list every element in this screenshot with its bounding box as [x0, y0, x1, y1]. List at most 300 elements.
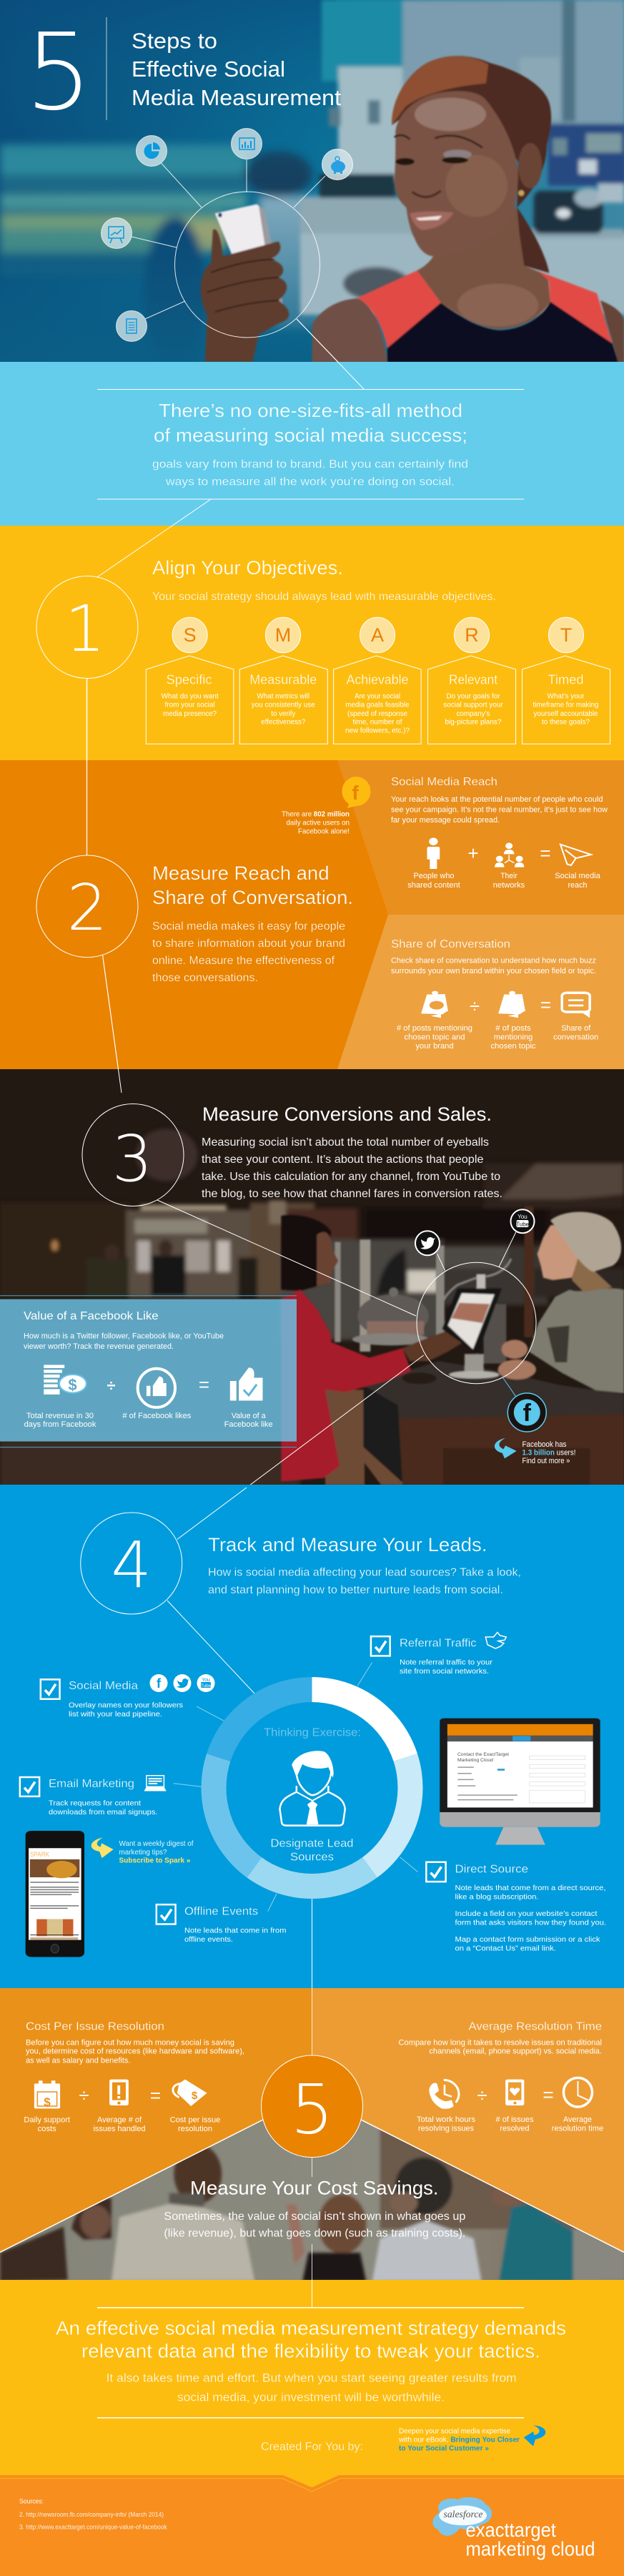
SMART card: Timed [523, 617, 610, 744]
SMART card: Measurable: to verify [271, 710, 295, 718]
resolution time text: Average Resolution Time [469, 2021, 602, 2033]
step 5 badge [262, 2055, 363, 2158]
time formula operators: = [543, 2084, 554, 2105]
woman: shoulders [312, 298, 387, 363]
share formula labels: mentioning [494, 1033, 533, 1041]
panel: value of a facebook like: ÷ [107, 1377, 116, 1395]
icon: checkbox [371, 1636, 390, 1656]
step 1 badge [36, 576, 138, 678]
SMART card: Relevant: social support your [443, 702, 503, 709]
left woman: red jacket [281, 1289, 411, 1482]
cost formula labels: costs [38, 2125, 56, 2133]
icon: twitter [415, 1231, 440, 1255]
cost formula labels: Average # of [97, 2115, 142, 2124]
icon: businessman [279, 1751, 345, 1826]
share formula labels: Share of [561, 1024, 591, 1033]
social media reach text [391, 776, 608, 825]
step 5 body [164, 2211, 466, 2240]
phone: newsletter screenshot [26, 1831, 84, 1957]
step 2 body: those conversations. [152, 972, 258, 984]
icon: phone alert [109, 2080, 129, 2105]
panel: step 1 [0, 499, 624, 855]
panel: step 2 [0, 760, 624, 1093]
cost formula labels: Cost per issue [170, 2115, 220, 2124]
icon: facebook bubble [342, 777, 370, 808]
teal shirt man [491, 2189, 522, 2207]
step 4 body: How is social media affecting your lead sources? Take a look, [208, 1566, 521, 1579]
time formula labels: Average [563, 2115, 592, 2124]
icon: price tag [173, 2080, 207, 2106]
step 4 body: and start planning how to better nurture leads from social. [208, 1584, 503, 1596]
item: direct source: like a blog subscription. [455, 1892, 539, 1901]
step 5 heading: Measure Your Cost Savings. [190, 2177, 439, 2198]
SMART card: Achievable: time, number of [353, 719, 402, 727]
intro heading: There’s no one-size-fits-all method [159, 400, 462, 421]
icon: piggy bank [322, 149, 353, 180]
SMART card: Achievable [334, 617, 421, 744]
intro heading: of measuring social media success; [154, 425, 467, 446]
panel: footer [0, 2475, 624, 2576]
photo: team at whiteboard [0, 2120, 624, 2280]
social media reach text: Social Media Reach [391, 776, 497, 788]
reach formula labels: shared content [407, 881, 460, 890]
time formula labels [417, 2115, 603, 2133]
icon: youtube [510, 1209, 535, 1233]
share formula operators [470, 994, 551, 1017]
cabinet [325, 1390, 365, 1485]
title [132, 29, 341, 110]
SMART card: Measurable: Measurable [249, 673, 317, 687]
logo: salesforce exacttarget marketing cloud: salesforce [443, 2509, 483, 2520]
donut centre label: Sources [290, 1852, 334, 1864]
phone: newsletter screenshot: SPARK [30, 1851, 49, 1858]
monitor: contact form screenshot [440, 1719, 600, 1844]
right woman: hands [502, 1339, 528, 1359]
panel: value of a facebook like: Value of a Facebook Like [24, 1310, 159, 1322]
right woman: hair [570, 1258, 613, 1292]
step 4 body [208, 1566, 521, 1596]
icon: coins [44, 1365, 86, 1395]
panel: value of a facebook like: Total revenue in 30 [26, 1412, 94, 1420]
resolution time text: Compare how long it takes to resolve issues on traditional [399, 2038, 602, 2047]
cost formula operators [79, 2085, 161, 2106]
title: Effective Social [132, 56, 285, 82]
share formula labels: # of posts mentioning [397, 1024, 472, 1033]
photo edge lines [0, 2120, 624, 2252]
step 5 body: (like revenue), but what goes down (such as training costs). [164, 2228, 465, 2240]
share formula labels [397, 1024, 598, 1051]
social media reach text: Your reach looks at the potential number of people who could [391, 795, 603, 804]
reach formula labels: Their [500, 872, 517, 880]
cost formula labels: issues handled [93, 2125, 146, 2133]
phone [215, 205, 283, 310]
icons: social network badges: You [202, 1678, 210, 1683]
item: direct source: Direct Source [455, 1864, 528, 1875]
item: offline events: offline events. [184, 1935, 233, 1944]
right woman: hat [550, 1212, 621, 1272]
right man [395, 2158, 452, 2215]
icon: laptop [144, 1776, 167, 1791]
item: referral traffic: site from social networks. [400, 1667, 489, 1676]
sources [19, 2498, 167, 2532]
panel: value of a facebook like: days from Facebook [24, 1420, 96, 1429]
cost formula labels: Daily support [24, 2115, 70, 2124]
cost formula operators: = [150, 2085, 161, 2106]
share of conversation text: surrounds your own brand within your chosen field or topic. [391, 967, 596, 975]
icon: facebook circle [507, 1393, 546, 1432]
time formula icons [429, 2078, 593, 2109]
panel: share of conversation background [337, 915, 624, 1069]
panel: value of a facebook like: # of Facebook likes [122, 1412, 192, 1420]
step 5 body: Sometimes, the value of social isn’t shown in what goes up [164, 2211, 466, 2223]
donut centre label [270, 1838, 353, 1864]
hero photo [0, 0, 624, 374]
share of conversation text [391, 938, 596, 975]
icon: facebook bubble: f [352, 782, 359, 804]
share formula labels: conversation [553, 1033, 598, 1041]
sources: 2. http://newsroom.fb.com/company-info/ (March 2014) [19, 2511, 164, 2519]
panel: intro statement [0, 319, 624, 526]
resolution time text [399, 2021, 602, 2056]
panel: social media reach background [337, 760, 624, 915]
monitor: contact form screenshot: Marketing Cloud [457, 1758, 493, 1763]
step 2 heading: Measure Reach and [152, 862, 329, 884]
SMART card: Timed: timeframe for making [533, 702, 599, 709]
facebook users callout [495, 1438, 576, 1465]
SMART card: Relevant: Do your goals for [446, 693, 500, 701]
tablet callout lines [157, 1200, 536, 1539]
SMART card: Relevant: R [465, 624, 479, 646]
item: direct source: Map a contact form submission or a click [455, 1935, 600, 1944]
share formula labels: chosen topic [490, 1042, 536, 1051]
step 3 body [202, 1136, 502, 1200]
item: direct source: on a “Contact Us” email link. [455, 1944, 556, 1952]
icon: presentation [101, 217, 132, 249]
left woman: face [317, 1232, 338, 1286]
reach formula labels [407, 872, 601, 890]
icon: youtube: Tube [516, 1221, 530, 1227]
step 1 intro: Your social strategy should always lead with measurable objectives. [152, 591, 496, 603]
icon: note with cloud [421, 991, 448, 1018]
reach formula icons [427, 837, 591, 869]
cost formula labels [24, 2115, 220, 2133]
ebook callout: Deepen your social media expertise [399, 2427, 510, 2436]
share of conversation text: Share of Conversation [391, 938, 510, 950]
item: social media: list with your lead pipeline. [69, 1710, 162, 1719]
title numeral: 5 [25, 11, 92, 134]
cost per issue text: you, determine cost of resources (like hardware and software), [26, 2047, 244, 2056]
spark subscribe callout: marketing tips? [119, 1848, 167, 1857]
SMART card: Specific: from your social [165, 702, 215, 709]
panel: hero [0, 0, 624, 389]
item: email marketing [20, 1776, 167, 1817]
icon: calendar [34, 2080, 60, 2108]
item: offline events: Offline Events [184, 1905, 258, 1918]
intro body: ways to measure all the work you’re doing on social. [165, 476, 455, 488]
step 3 body: take. Use this calculation for any channel, from YouTube to [202, 1171, 500, 1183]
counter [363, 1361, 624, 1418]
item: email marketing: downloads from email signups. [49, 1808, 157, 1817]
reach formula labels: Social media [555, 872, 601, 880]
icon: checkbox [426, 1862, 446, 1882]
cost per issue text: Before you can figure out how much money social is saving [26, 2038, 234, 2047]
step 2 badge [36, 855, 138, 958]
icon: thumb with check [230, 1367, 262, 1400]
icon: blank note [498, 991, 525, 1018]
icons: social network badges: f [157, 1676, 162, 1691]
right woman: face [538, 1225, 578, 1280]
icon: checkbox [41, 1679, 60, 1699]
cost per issue text: Cost Per Issue Resolution [26, 2021, 164, 2033]
cost formula labels: resolution [178, 2125, 212, 2133]
conclusion heading [56, 2317, 566, 2362]
share formula icons [421, 991, 590, 1018]
social media reach text: see your campaign. It’s not the real number, it’s just to see how [391, 806, 608, 815]
item: social media [41, 1674, 214, 1719]
icon: checkbox [157, 1904, 176, 1924]
SMART card: Measurable: What metrics will [257, 693, 309, 701]
step 5 badge: 5 [290, 2071, 334, 2150]
SMART card: Relevant: big-picture plans? [445, 719, 502, 727]
share formula operators: = [540, 994, 551, 1016]
woman: red straps [357, 270, 441, 348]
share formula labels: chosen topic and [405, 1033, 465, 1041]
sources: 3. http://www.exacttarget.com/unique-value-of-facebook [19, 2524, 167, 2532]
icon: like in circle [138, 1369, 175, 1407]
step 1 badge: 1 [65, 591, 105, 666]
panel: value of a facebook like: How much is a Twitter follower, Facebook like, or YouTube [24, 1332, 224, 1341]
SMART card: Achievable: A [371, 624, 384, 646]
facebook users callout: Facebook has [522, 1440, 567, 1449]
icons: coins, like, value [44, 1365, 262, 1407]
time formula labels: # of issues [496, 2115, 534, 2124]
spark subscribe callout: Want a weekly digest of [119, 1839, 194, 1848]
SMART card: Timed: T [560, 624, 572, 646]
item: direct source: Include a field on your website’s contact [455, 1909, 598, 1918]
title: Steps to [132, 29, 217, 53]
time formula labels: resolution time [552, 2124, 603, 2133]
panel: step 3 [0, 955, 624, 1539]
facebook stat callout [282, 810, 350, 836]
step 4 badge [81, 1513, 182, 1614]
step 4 heading: Track and Measure Your Leads. [208, 1534, 487, 1555]
intro body: goals vary from brand to brand. But you can certainly find [152, 458, 468, 471]
SMART card: Measurable: you consistently use [252, 702, 315, 709]
SMART card: Relevant: company’s [456, 710, 490, 718]
left woman: hand [402, 1331, 463, 1362]
logo: salesforce exacttarget marketing cloud: marketing cloud [466, 2537, 595, 2560]
logo: salesforce exacttarget marketing cloud: exacttarget [466, 2519, 556, 2541]
resolution time text: channels (email, phone support) vs. social media. [429, 2047, 602, 2056]
icon: paper plane [560, 845, 591, 865]
title divider [106, 17, 107, 120]
SMART card: Timed: What’s your [548, 693, 585, 701]
ebook callout: with our eBook, Bringing You Closer [398, 2436, 520, 2444]
share of conversation text: Check share of conversation to understand how much buzz [391, 957, 596, 965]
SMART card: Specific: S [184, 624, 197, 646]
SMART card: Measurable: effectiveness? [261, 719, 306, 727]
time formula labels: resolved [500, 2124, 529, 2133]
SMART card: Timed: yourself accountable [533, 710, 598, 718]
icon: pie chart [136, 136, 167, 166]
sources: Sources: [19, 2498, 44, 2506]
panel: conclusion [0, 2280, 624, 2494]
SMART card: Relevant: Relevant [449, 673, 497, 687]
donut centre label: Designate Lead [270, 1838, 353, 1849]
SMART card: Specific: What do you want [162, 693, 219, 701]
item: offline events: Note leads that come in from [184, 1927, 287, 1935]
conclusion heading: An effective social media measurement strategy demands [56, 2317, 566, 2339]
icon: phone clock [429, 2080, 459, 2109]
icon: network [495, 842, 524, 867]
item: referral traffic: Referral Traffic [400, 1637, 477, 1649]
step 2 heading [152, 862, 353, 908]
SMART card: Timed: Timed [548, 673, 583, 687]
left man [71, 2198, 112, 2240]
time formula operators: ÷ [477, 2085, 487, 2106]
SMART card: Specific [146, 617, 234, 744]
panel: step 5 [0, 1988, 624, 2281]
SMART card: Achievable: Are your social [355, 693, 400, 701]
SMART card: Achievable: Achievable [346, 673, 409, 687]
facebook stat callout: There are 802 million [282, 810, 350, 819]
icon: notepad [116, 310, 147, 342]
panel: value of a facebook like: Value of a [232, 1412, 267, 1420]
item: offline events [157, 1904, 287, 1944]
conclusion body: It also takes time and effort. But when you start seeing greater results from [107, 2372, 517, 2385]
left woman: hair [281, 1215, 331, 1291]
conclusion body: social media, your investment will be worthwhile. [177, 2391, 445, 2404]
facebook users callout: Find out more » [522, 1457, 570, 1465]
time formula operators [477, 2084, 554, 2106]
photo: cafe scene [0, 1069, 624, 1489]
item: direct source: Note leads that come from a direct source, [455, 1884, 606, 1892]
credit line: Created For You by: [261, 2441, 363, 2453]
SMART card: Specific: media presence? [163, 710, 217, 718]
title: Media Measurement [132, 85, 341, 110]
right woman: shirt [529, 1288, 624, 1393]
time formula labels: resolving issues [418, 2124, 474, 2133]
step 1 heading: Align Your Objectives. [152, 557, 343, 579]
SMART card: Timed: to these goals? [542, 719, 590, 727]
step 3 badge [82, 1104, 184, 1206]
share formula labels: your brand [416, 1042, 453, 1051]
SMART card: Relevant [428, 617, 516, 744]
hand [201, 229, 289, 362]
share formula labels: # of posts [495, 1024, 531, 1033]
reach formula labels: networks [493, 881, 525, 890]
item: email marketing: Track requests for content [49, 1799, 141, 1807]
phone callout lines and circle [132, 159, 365, 389]
SMART card: Achievable: (speed of response [347, 710, 407, 718]
item: email marketing: Email Marketing [49, 1778, 134, 1790]
share formula operators: ÷ [470, 996, 480, 1017]
step 2 body [152, 920, 345, 984]
reach formula labels: People who [413, 872, 455, 880]
step 2 body: to share information about your brand [152, 938, 345, 950]
panel: step 5: $ [192, 2090, 198, 2102]
reach formula operators: = [540, 842, 551, 864]
cost per issue text [26, 2021, 244, 2065]
panel: value of a facebook like: viewer worth? Track the revenue generated. [24, 1342, 174, 1351]
SMART card: Specific: Specific [166, 673, 212, 687]
panel: value of a facebook like: = [199, 1374, 209, 1395]
item: social media: Social Media [69, 1680, 138, 1692]
panel: value of a facebook like: Facebook like [224, 1420, 273, 1429]
SMART card: Achievable: new followers, etc.)? [345, 727, 410, 735]
woman [287, 2204, 304, 2265]
leader lines [174, 1663, 418, 1912]
icon: phone heart [505, 2080, 524, 2105]
panel: value of a facebook like: $ [68, 1376, 77, 1394]
icon: clock [563, 2078, 593, 2107]
woman: ponytail and hair [392, 56, 551, 273]
cost per issue text: as well as salary and benefits. [26, 2056, 130, 2065]
panel: step 5: $ [44, 2095, 51, 2109]
cake dome [357, 1294, 429, 1330]
conclusion heading: relevant data and the flexibility to tweak your tactics. [81, 2341, 540, 2362]
item: direct source [426, 1862, 606, 1952]
intro heading [154, 400, 467, 446]
panel: step 4 [0, 1485, 624, 1988]
panel: value of a facebook like [0, 1296, 297, 1447]
step 4 badge: 4 [111, 1528, 152, 1603]
step 3 body: Measuring social isn’t about the total number of eyeballs [202, 1136, 489, 1149]
conclusion body [107, 2372, 517, 2404]
item: social media: Overlay names on your followers [69, 1701, 183, 1709]
woman: face [395, 91, 518, 256]
step 2 heading: Share of Conversation. [152, 887, 353, 908]
SMART card: Achievable: media goals feasible [346, 702, 410, 709]
ebook callout [398, 2426, 545, 2453]
icon: facebook circle: f [523, 1400, 532, 1427]
step 3 body: the blog, to see how that channel fares in conversion rates. [202, 1188, 502, 1200]
item: referral traffic: Note referral traffic to your [400, 1658, 493, 1667]
icon: bar chart [232, 129, 262, 159]
step 3 badge: 3 [112, 1121, 152, 1196]
woman: neck and chest [417, 207, 550, 329]
step 3 heading: Measure Conversions and Sales. [202, 1103, 492, 1125]
step 2 body: online. Measure the effectiveness of [152, 955, 335, 967]
facebook stat callout: Facebook alone! [298, 827, 350, 836]
spark subscribe callout: Subscribe to Spark » [119, 1857, 191, 1865]
step 2 badge: 2 [67, 870, 107, 945]
icon: speech bubble [562, 993, 590, 1018]
icons: social network badges [150, 1674, 214, 1692]
reach formula operators [467, 842, 551, 864]
donut chart: lead sources [202, 1677, 422, 1899]
SMART card: Measurable [239, 617, 327, 744]
centre man [174, 2144, 222, 2204]
social media reach text: far your message could spread. [391, 816, 500, 825]
facebook stat callout: daily active users on [286, 819, 350, 827]
reach formula operators: + [467, 842, 479, 864]
icon: checkbox [20, 1777, 39, 1796]
icons: social network badges: Tube [201, 1683, 212, 1688]
SMART card: Measurable: M [275, 624, 291, 646]
icon: youtube: You [517, 1214, 528, 1220]
facebook users callout: 1.3 billion users! [522, 1449, 576, 1457]
intro body [152, 458, 468, 488]
time formula labels: Total work hours [417, 2115, 476, 2124]
ebook callout: to Your Social Customer » [399, 2444, 489, 2453]
cost formula icons [34, 2080, 207, 2108]
monitor: contact form screenshot: Contact the ExactTarget [457, 1752, 509, 1757]
cost formula operators: ÷ [79, 2085, 89, 2106]
icon: person [427, 837, 440, 869]
woman: black dress [387, 302, 618, 363]
item: referral traffic [371, 1632, 506, 1676]
